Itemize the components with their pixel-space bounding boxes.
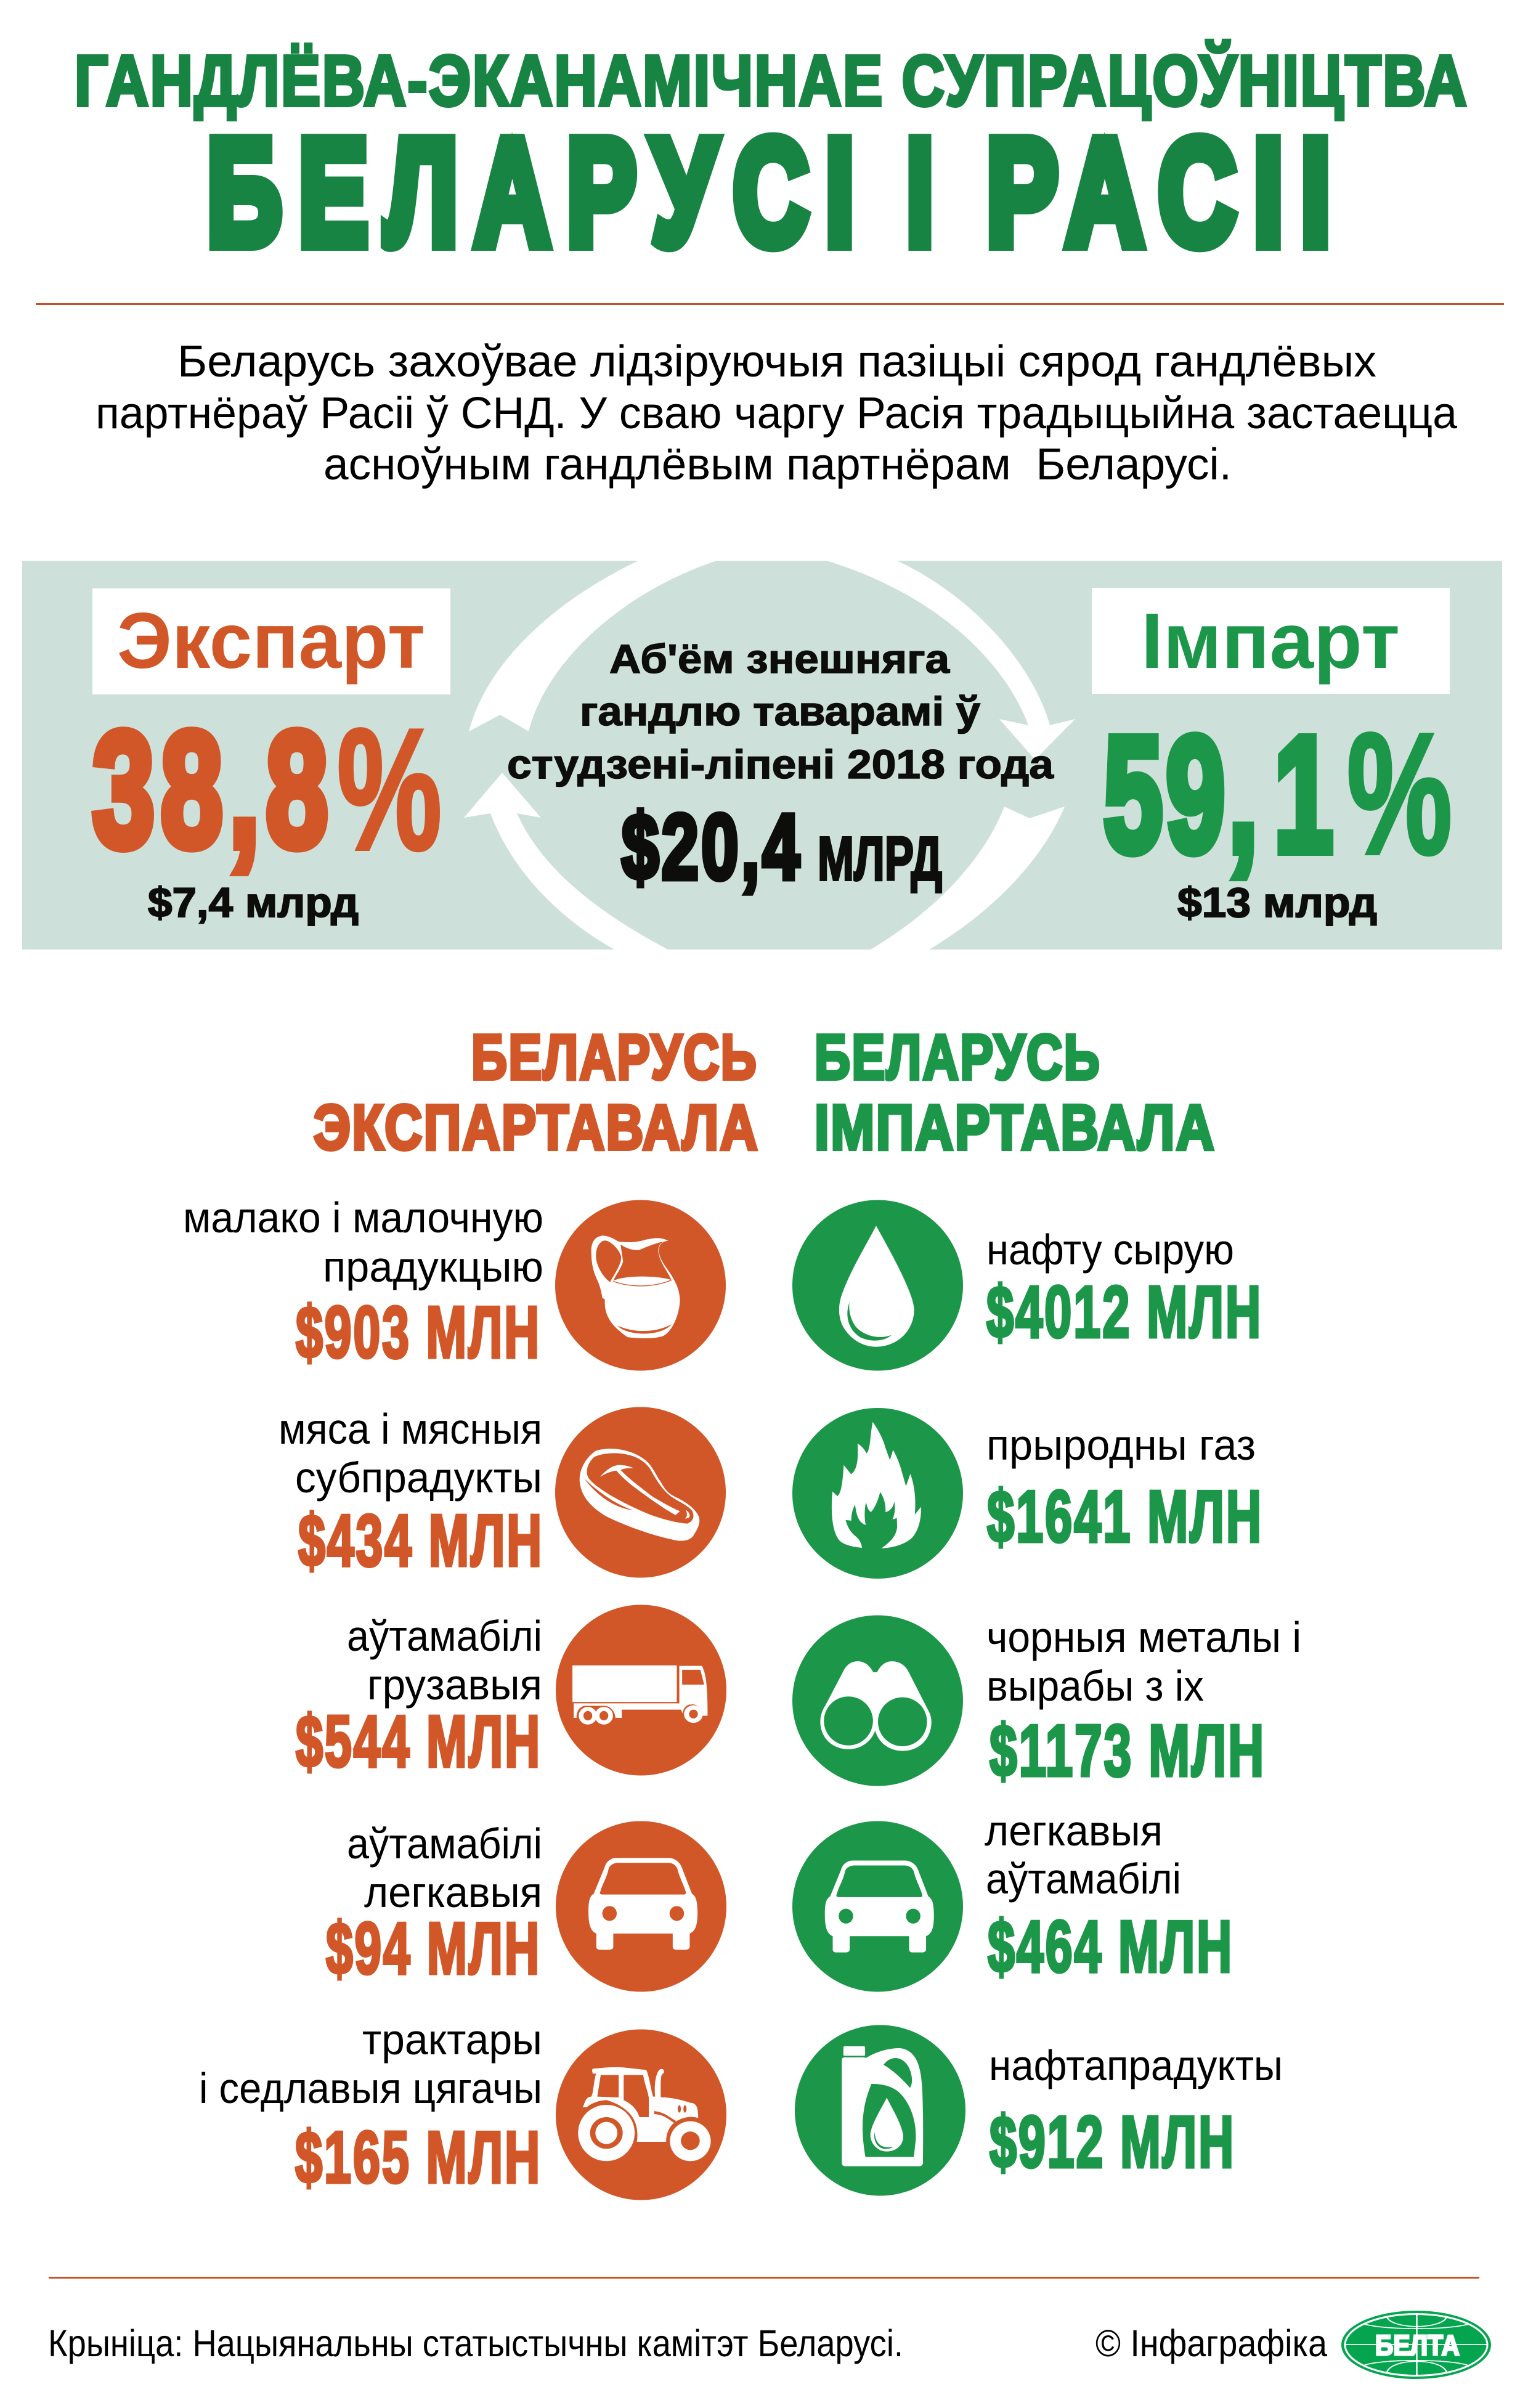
icon: oil canister bbox=[795, 2025, 965, 2196]
central total: Аб'ём знешняга bbox=[609, 636, 950, 681]
logo: BELTA: БЕЛТА bbox=[1375, 2329, 1460, 2361]
import item: petroleum products: нафтапрадукты bbox=[989, 2041, 1283, 2089]
export label: Экспарт bbox=[117, 597, 425, 685]
source note: Крыніца: Нацыянальны статыстычны камітэт Беларусі. bbox=[48, 2322, 903, 2364]
export item: milk: малако і малочную bbox=[183, 1194, 543, 1242]
title: І bbox=[906, 108, 933, 276]
import item: ferrous metals bbox=[792, 1613, 1301, 1792]
export item: meat bbox=[278, 1405, 726, 1582]
central total: студзені-ліпені 2018 года bbox=[507, 741, 1054, 787]
icon: flame bbox=[792, 1408, 963, 1579]
export item: milk: $903 МЛН bbox=[296, 1291, 541, 1373]
import item: crude oil: нафту сырую bbox=[986, 1226, 1234, 1274]
export item: tractors: і седлавыя цягачы bbox=[199, 2064, 542, 2112]
panel: trade volume bbox=[22, 561, 1502, 950]
import item: ferrous metals: $1173 МЛН bbox=[990, 1710, 1266, 1792]
icon: milk jug bbox=[555, 1200, 726, 1370]
export item: trucks: $544 МЛН bbox=[296, 1701, 542, 1783]
intro text block: Беларусь захоўвае лідзіруючыя пазіцыі сярод гандлёвых bbox=[177, 337, 1376, 386]
icon: binoculars bbox=[792, 1616, 963, 1786]
heading: export column: БЕЛАРУСЬ bbox=[471, 1022, 758, 1092]
intro text block bbox=[96, 337, 1458, 489]
export share: $7,4 млрд bbox=[148, 879, 359, 926]
import item: passenger cars: $464 МЛН bbox=[988, 1906, 1233, 1988]
import item: ferrous metals: чорныя металы і bbox=[986, 1613, 1301, 1661]
import item: passenger cars bbox=[792, 1807, 1233, 1991]
arrows: circular exchange bbox=[464, 561, 1075, 950]
heading: export column bbox=[314, 1022, 759, 1163]
import item: passenger cars: легкавыя bbox=[985, 1807, 1163, 1855]
import share: $13 млрд bbox=[1177, 879, 1377, 926]
export item: tractors: трактары bbox=[362, 2015, 542, 2064]
export item: passenger cars: $94 МЛН bbox=[326, 1908, 541, 1990]
heading: import column: ІМПАРТАВАЛА bbox=[815, 1092, 1216, 1163]
icon: oil drop bbox=[792, 1200, 963, 1370]
export item: tractors bbox=[199, 2015, 726, 2200]
intro text block: асноўным гандлёвым партнёрам Беларусі. bbox=[323, 440, 1232, 489]
export item: trucks: аўтамабілі bbox=[347, 1612, 542, 1660]
title: РАСІІ bbox=[986, 108, 1348, 276]
export item: passenger cars bbox=[326, 1820, 726, 1991]
icon: car bbox=[556, 1821, 726, 1991]
title: БЕЛАРУСІ bbox=[207, 108, 871, 276]
import item: natural gas: прыродны газ bbox=[986, 1421, 1256, 1469]
export item: milk: прадукцыю bbox=[323, 1243, 543, 1291]
logo: BELTA bbox=[1341, 2311, 1491, 2379]
export item: passenger cars: легкавыя bbox=[364, 1868, 542, 1916]
import item: natural gas bbox=[792, 1408, 1263, 1579]
export share: 38,8 bbox=[92, 698, 334, 881]
export item: tractors: $165 МЛН bbox=[295, 2117, 542, 2199]
central total: гандлю таварамі ў bbox=[580, 688, 980, 734]
export item: passenger cars: аўтамабілі bbox=[347, 1820, 542, 1868]
import item: crude oil: $4012 МЛН bbox=[986, 1271, 1262, 1353]
import label bbox=[1092, 588, 1450, 694]
heading: export column: ЭКСПАРТАВАЛА bbox=[314, 1092, 759, 1163]
import share: % bbox=[1347, 698, 1452, 890]
export share: % bbox=[337, 694, 442, 886]
icon: tractor bbox=[556, 2030, 726, 2200]
import item: ferrous metals: вырабы з іх bbox=[986, 1662, 1204, 1710]
central total: $20,4 bbox=[622, 795, 802, 898]
intro text block: партнёраў Расіі ў СНД. У сваю чаргу Расія традыцыйна застаецца bbox=[96, 389, 1458, 438]
export item: meat: субпрадукты bbox=[295, 1454, 542, 1502]
import item: petroleum products: $912 МЛН bbox=[990, 2101, 1235, 2183]
export item: milk bbox=[183, 1194, 726, 1373]
central total: МЛРД bbox=[818, 824, 942, 893]
heading: import column bbox=[815, 1022, 1216, 1163]
credit: © Інфаграфіка bbox=[1095, 2322, 1327, 2364]
import share: 59, 1 bbox=[1103, 703, 1336, 886]
icon: car bbox=[792, 1821, 963, 1991]
import label: Імпарт bbox=[1141, 597, 1400, 685]
icon: truck bbox=[556, 1605, 726, 1776]
export item: trucks: грузавыя bbox=[367, 1661, 542, 1709]
export item: meat: $434 МЛН bbox=[298, 1500, 543, 1582]
import item: natural gas: $1641 МЛН bbox=[987, 1476, 1263, 1558]
icon: steak bbox=[555, 1407, 726, 1577]
central total bbox=[507, 636, 1054, 898]
heading: import column: БЕЛАРУСЬ bbox=[815, 1022, 1101, 1092]
import item: crude oil bbox=[792, 1200, 1262, 1370]
title bbox=[75, 40, 1468, 276]
import item: passenger cars: аўтамабілі bbox=[986, 1855, 1181, 1903]
import item: petroleum products bbox=[795, 2025, 1283, 2196]
export item: trucks bbox=[296, 1605, 726, 1783]
export item: meat: мяса і мясныя bbox=[278, 1405, 542, 1453]
